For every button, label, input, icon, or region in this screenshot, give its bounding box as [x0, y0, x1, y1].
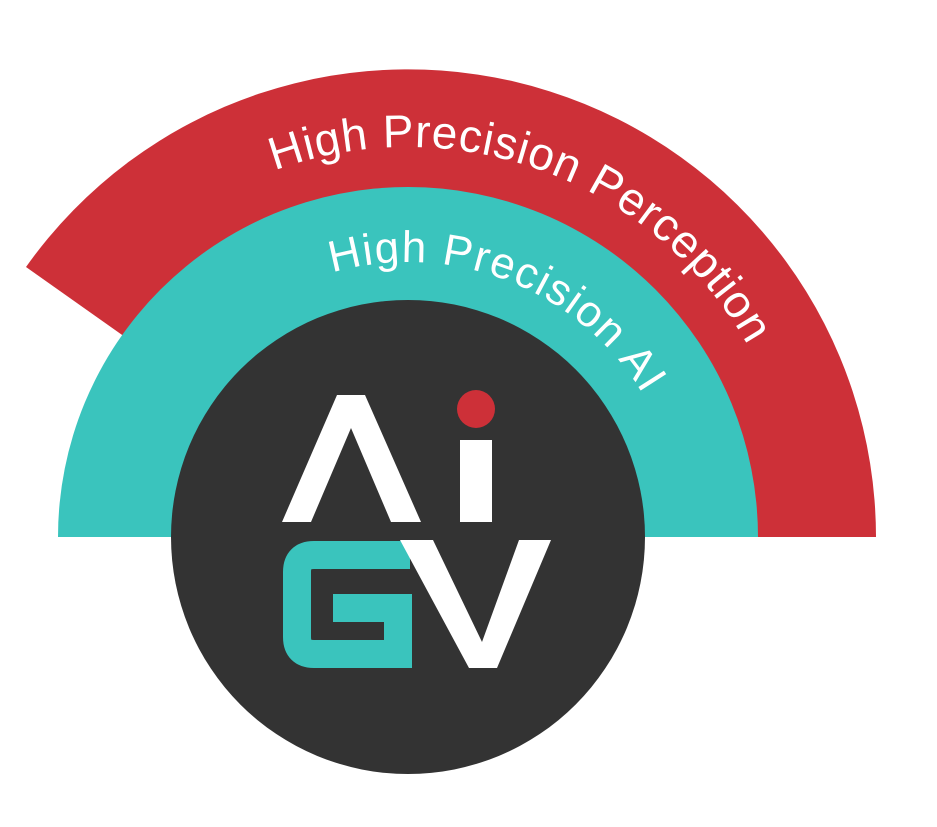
- dark center circle with AIGV logo: [171, 300, 645, 774]
- logo: V: [400, 540, 551, 668]
- logo: red dot: [457, 390, 495, 428]
- logo: i: [460, 440, 492, 522]
- red outer arc: High Precision Perception: High Precision Perception: [268, 116, 765, 342]
- logo: G: [297, 555, 410, 654]
- logo: A (lambda): [282, 395, 421, 522]
- teal middle arc: High Precision AI: High Precision AI: [328, 230, 666, 390]
